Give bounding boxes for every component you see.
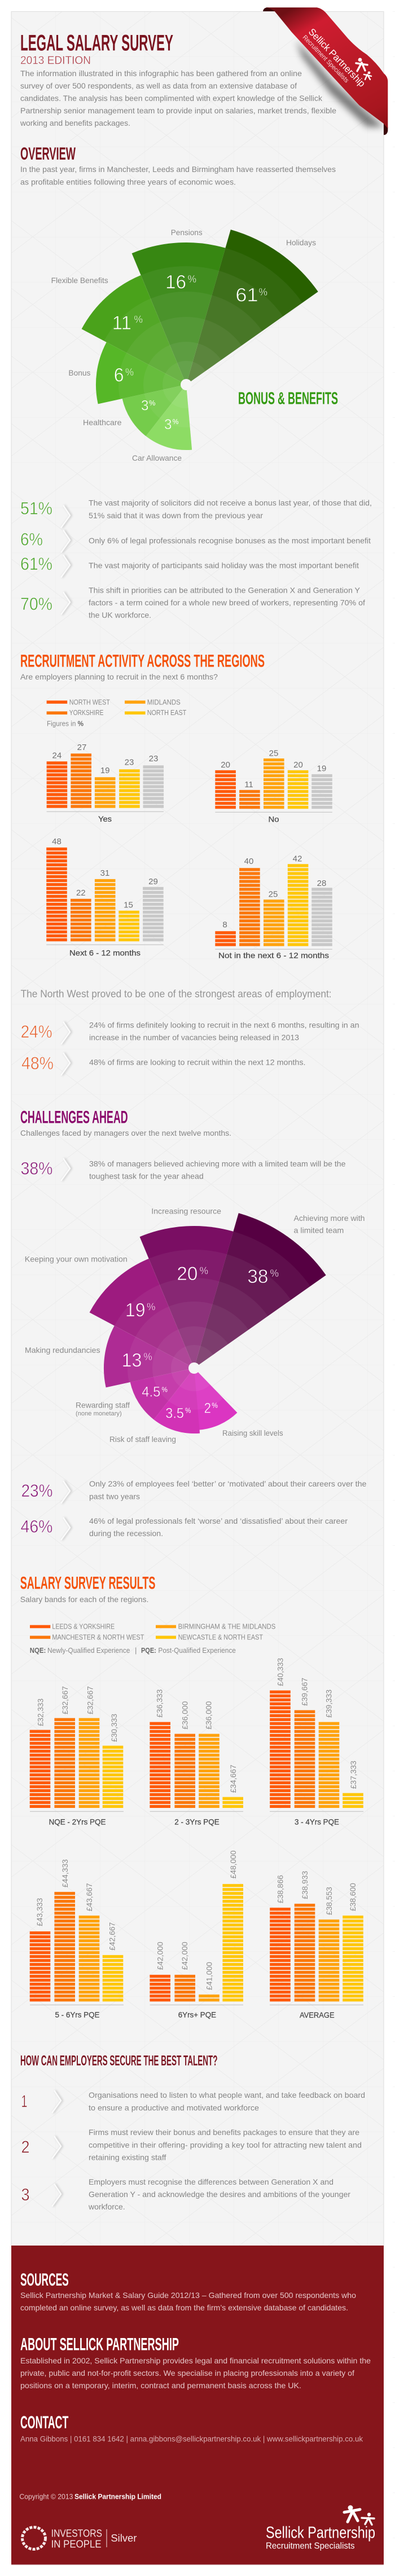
bar chart: NQE - 2Yrs PQE: NQE - 2Yrs PQE: [49, 1818, 106, 1827]
subheading: challenges: Challenges faced by managers over the next twelve months.: [20, 1128, 231, 1137]
step 3: Employers must recognise the differences between Generation X and: [89, 2177, 333, 2186]
step 1: Organisations need to listen to what people want, and take feedback on board: [89, 2090, 365, 2099]
chart: bonus and benefits fan: %: [188, 274, 196, 285]
chart: challenges fan: Rewarding staff: [76, 1401, 130, 1410]
chart: challenges fan: Making redundancies: [25, 1346, 100, 1355]
bar chart: average: £38,933: [300, 1871, 309, 1899]
ribbon: Sellick Partnership: [263, 7, 388, 135]
chart: bonus and benefits fan: 3: [141, 398, 148, 414]
stat: 46%: 46%: [20, 1516, 53, 1536]
chart: challenges fan: a limited team: [293, 1226, 344, 1235]
chart: challenges fan: (none monetary): [76, 1410, 122, 1417]
bar chart: average: [270, 1871, 363, 2019]
chart: challenges fan: %: [147, 1301, 155, 1312]
chart: bonus and benefits fan: Pensions: [171, 228, 203, 237]
bar chart: yes: 24: [52, 751, 62, 760]
bar chart: 5 - 6Yrs PQE: 5 - 6Yrs PQE: [55, 2010, 99, 2019]
bar chart: next 6-12 months: 48: [52, 837, 62, 846]
chart: bonus and benefits fan: Car Allowance: [132, 453, 182, 462]
subheading: salary: Salary bands for each of the regions.: [20, 1595, 148, 1604]
heading: overview: OVERVIEW: [20, 143, 76, 164]
chart: bonus and benefits fan: %: [173, 417, 179, 426]
overview text: [20, 165, 336, 187]
bar chart: 5 - 6Yrs PQE: £42,667: [108, 1922, 117, 1951]
bar chart: NQE - 2Yrs PQE: £32,333: [36, 1699, 45, 1726]
stat: 38%: 38%: [20, 1158, 53, 1179]
step 2: 2: [21, 2137, 29, 2156]
stat: 70%: [20, 585, 365, 619]
stat: 24%: 24%: [21, 1021, 52, 1042]
copyright: Copyright © 2013: [19, 2493, 73, 2501]
chart: bonus and benefits fan: Healthcare: [83, 418, 122, 427]
bar chart: 3 - 4Yrs PQE: £39,333: [324, 1690, 333, 1718]
stat: 70%: 70%: [20, 594, 52, 614]
bar chart: 3 - 4Yrs PQE: £37,333: [349, 1761, 358, 1789]
copyright: [19, 2493, 161, 2501]
contact details: Anna Gibbons | 0161 834 1642 | anna.gibbons@sellickpartnership.co.uk | www.sellickpartnership.co.uk: [20, 2434, 363, 2443]
chart: bonus and benefits fan: 11: [112, 312, 131, 334]
bar chart: average: £38,600: [348, 1883, 357, 1911]
bar chart: 5 - 6Yrs PQE: £43,667: [85, 1883, 94, 1911]
bar chart: not in the next 6-12 months: Not in the next 6 - 12 months: [218, 951, 329, 960]
bar chart: 3 - 4Yrs PQE: £39,667: [300, 1678, 309, 1706]
chart: challenges fan: Risk of staff leaving: [109, 1435, 176, 1444]
logo: investors in people: Silver: [111, 2533, 137, 2544]
stat: 61%: 61%: [20, 554, 52, 574]
bar chart: average: £38,553: [324, 1887, 333, 1915]
bar chart: not in the next 6-12 months: 28: [317, 879, 326, 888]
bar chart: yes: Yes: [98, 814, 112, 823]
chart: challenges fan: 38: [247, 1266, 268, 1287]
stat: 23%: [21, 1479, 367, 1503]
stat: 70%: the UK workforce.: [89, 610, 151, 619]
step 3: workforce.: [88, 2202, 125, 2211]
stat: 61%: The vast majority of participants said holiday was the most important benefit: [89, 561, 359, 570]
stat: 38%: toughest task for the year ahead: [89, 1172, 204, 1181]
about text: Established in 2002, Sellick Partnership provides legal and financial recruitment solutions within the: [20, 2356, 371, 2365]
step 1: to ensure a productive and motivated workforce: [89, 2103, 259, 2112]
overview text: as profitable entities following three years of economic woes.: [20, 178, 236, 187]
bar chart: 6Yrs+ PQE: £42,000: [156, 1942, 165, 1970]
stat: 48%: 48% of firms are looking to recruit within the next 12 months.: [89, 1057, 306, 1066]
step 3: [21, 2177, 350, 2211]
bar chart: not in the next 6-12 months: 42: [293, 854, 302, 863]
chart: challenges fan: 4.5: [142, 1384, 160, 1400]
bar chart: next 6-12 months: 31: [100, 868, 109, 878]
bar chart: 6Yrs+ PQE: [150, 1850, 243, 2019]
chart: challenges fan: Achieving more with: [293, 1214, 365, 1223]
bar chart: yes: 19: [100, 766, 110, 775]
sources text: [20, 2291, 356, 2312]
heading: how can employers secure the best talent: HOW CAN EMPLOYERS SECURE THE BEST TALENT?: [20, 2053, 217, 2069]
chart: challenges fan: 13: [122, 1349, 142, 1371]
chart: challenges fan: %: [143, 1351, 152, 1362]
stat: 6%: [20, 529, 371, 553]
chart: challenges fan: %: [185, 1406, 191, 1415]
stat: 51%: 51% said that it was down from the previous year: [89, 511, 263, 520]
sources text: completed an online survey, as well as data from the firm’s extensive database of candidates.: [20, 2303, 348, 2312]
intro text: working and benefits packages.: [20, 118, 130, 127]
heading: sources: SOURCES: [20, 2269, 69, 2290]
bar chart: next 6-12 months: 22: [76, 888, 86, 898]
copyright: Sellick Partnership Limited: [74, 2493, 161, 2501]
stat: 46%: 46% of legal professionals felt ‘worse’ and ‘dissatisfied’ about their career: [89, 1516, 348, 1525]
legend: salary regions: MANCHESTER & NORTH WEST: [52, 1633, 144, 1641]
intro text: The information illustrated in this infographic has been gathered from an online: [20, 69, 302, 78]
bar chart: 2 - 3Yrs PQE: £36,000: [204, 1701, 213, 1730]
bar chart: not in the next 6-12 months: 8: [222, 920, 227, 930]
step 2: retaining existing staff: [89, 2152, 166, 2162]
bar chart: 6Yrs+ PQE: £48,000: [229, 1850, 238, 1878]
chart: bonus and benefits fan: %: [258, 286, 267, 298]
chart: bonus and benefits fan: 61: [235, 284, 258, 306]
chart: bonus and benefits fan: [52, 230, 318, 461]
bar chart: next 6-12 months: 29: [148, 877, 158, 886]
intro text: survey of over 500 respondents, as well as data from an extensive database of: [20, 81, 297, 90]
about text: positions on a temporary, interim, contract and permanent basis across the UK.: [20, 2381, 301, 2390]
step 2: [21, 2128, 362, 2162]
stat: 70%: factors - a term coined for a whole new breed of workers, representing 70% of: [89, 598, 365, 607]
chart: challenges fan: 20: [177, 1263, 198, 1285]
chart: challenges fan: %: [162, 1385, 168, 1393]
bar chart: next 6-12 months: 15: [124, 900, 133, 910]
logo: investors in people: [23, 2528, 137, 2549]
heading: salary survey results: SALARY SURVEY RESULTS: [20, 1573, 155, 1593]
chart: bonus and benefits fan: %: [149, 399, 156, 407]
bar chart: 2 - 3Yrs PQE: £36,333: [155, 1689, 164, 1718]
chart: challenges fan: %: [200, 1265, 208, 1276]
stat: 24%: [21, 1020, 359, 1044]
stat: 51%: 51%: [20, 498, 52, 518]
logo: investors in people: IN PEOPLE: [51, 2538, 102, 2549]
stat: 38%: [20, 1158, 346, 1181]
chart: challenges fan: Increasing resource: [151, 1207, 221, 1216]
logo: sellick partnership: Recruitment Specialists: [266, 2541, 355, 2551]
chart: challenges fan: Raising skill levels: [222, 1428, 283, 1437]
overview text: In the past year, firms in Manchester, Leeds and Birmingham have reasserted themselves: [20, 165, 336, 174]
bar chart: no: 20: [221, 760, 230, 770]
stat: 70%: This shift in priorities can be attributed to the Generation X and Generation Y: [89, 585, 361, 594]
legend: salary regions: NQE:: [30, 1646, 46, 1655]
chart: challenges fan: Keeping your own motivation: [25, 1254, 128, 1263]
chart: challenges fan: %: [212, 1401, 218, 1410]
panel: footer: [11, 2246, 384, 2565]
stat: 51%: The vast majority of solicitors did not receive a bonus last year, of those that did,: [89, 499, 372, 508]
bar chart: 5 - 6Yrs PQE: [30, 1859, 124, 2019]
step 1: 1: [21, 2092, 27, 2111]
bar chart: 5 - 6Yrs PQE: £43,333: [35, 1898, 44, 1926]
stat: 24%: 24% of firms definitely looking to recruit in the next 6 months, resulting in an: [89, 1020, 359, 1029]
intro text: Partnership senior management team to provide input on salaries, market trends, flexible: [20, 106, 336, 115]
bar chart: 3 - 4Yrs PQE: £40,333: [275, 1658, 284, 1686]
bar chart: next 6-12 months: [46, 837, 164, 957]
legend: regions: Figures in %: [47, 720, 84, 728]
bar chart: 3 - 4Yrs PQE: 3 - 4Yrs PQE: [295, 1818, 339, 1827]
legend: regions: MIDLANDS: [147, 698, 181, 706]
heading: about: ABOUT SELLICK PARTNERSHIP: [20, 2334, 179, 2354]
chart: bonus and benefits fan: Bonus: [68, 368, 90, 377]
bar chart: 2 - 3Yrs PQE: £36,000: [181, 1701, 190, 1730]
step 3: 3: [21, 2185, 29, 2204]
legend: salary regions: PQE:: [141, 1646, 156, 1655]
stat: 6%: Only 6% of legal professionals recognise bonuses as the most important benefit: [89, 536, 371, 545]
bar chart: no: 20: [293, 760, 303, 770]
step 2: competitive in their offering- providing a key tool for attracting new talent and: [89, 2140, 362, 2149]
bar chart: yes: 23: [149, 754, 158, 764]
chart: bonus and benefits fan: 6: [114, 365, 124, 386]
logo: investors in people: INVESTORS: [51, 2528, 102, 2539]
stat: 6%: 6%: [20, 529, 43, 549]
about text: [20, 2356, 371, 2390]
chart: bonus and benefits fan: Holidays: [286, 238, 316, 247]
chart: challenges fan: 2: [204, 1401, 211, 1417]
subtitle: 2013 EDITION: [20, 54, 91, 67]
stat: 46%: [20, 1516, 348, 1540]
chart: bonus and benefits fan: Flexible Benefits: [51, 276, 108, 285]
step 2: Firms must review their bonus and benefits packages to ensure that they are: [89, 2128, 359, 2137]
about text: private, public and not-for-profit sectors. We specialise in placing professionals into a variety of: [20, 2368, 354, 2377]
stat: 38%: 38% of managers believed achieving more with a limited team will be the: [89, 1159, 346, 1168]
intro text: [20, 69, 336, 127]
heading: contact: CONTACT: [20, 2412, 68, 2432]
bar chart: average: AVERAGE: [300, 2010, 335, 2019]
bar chart: NQE - 2Yrs PQE: £30,333: [109, 1714, 118, 1742]
bar chart: NQE - 2Yrs PQE: £32,667: [60, 1686, 69, 1714]
bar chart: NQE - 2Yrs PQE: £32,667: [86, 1686, 95, 1714]
bar chart: NQE - 2Yrs PQE: [30, 1686, 124, 1827]
bar chart: yes: 23: [125, 758, 134, 767]
bar chart: 2 - 3Yrs PQE: [150, 1689, 243, 1827]
step 3: Generation Y - and acknowledge the desires and ambitions of the younger: [89, 2190, 350, 2199]
chart: challenges fan: 3.5: [165, 1405, 184, 1421]
bar chart: no: No: [269, 815, 279, 824]
bar chart: average: £38,866: [275, 1875, 284, 1903]
ribbon: Sellick Partnership: Sellick Partnership: [306, 27, 367, 89]
title: LEGAL SALARY SURVEY: [20, 30, 173, 55]
legend: regions: YORKSHIRE: [69, 709, 104, 717]
ribbon: Sellick Partnership: Recruitment Specialists: [301, 34, 350, 85]
chart: challenges fan: %: [270, 1268, 279, 1279]
stat: 48%: [21, 1053, 306, 1075]
legend: salary regions: [30, 1623, 275, 1655]
legend: salary regions: LEEDS & YORKSHIRE: [52, 1623, 115, 1631]
chart: challenges fan: 19: [125, 1299, 146, 1321]
legend: salary regions: BIRMINGHAM & THE MIDLANDS: [178, 1623, 275, 1631]
chart: challenges fan: [25, 1208, 365, 1444]
bar chart: not in the next 6-12 months: [215, 854, 332, 960]
legend: salary regions: Newly-Qualified Experience: [47, 1646, 130, 1655]
sources text: Sellick Partnership Market & Salary Guide 2012/13 – Gathered from over 500 respondents who: [20, 2291, 356, 2300]
stat: 46%: during the recession.: [89, 1529, 163, 1538]
stat: 48%: 48%: [21, 1053, 54, 1073]
subheading: recruitment: Are employers planning to recruit in the next 6 months?: [20, 672, 218, 681]
bar chart: no: 19: [317, 764, 326, 773]
bar chart: 3 - 4Yrs PQE: [270, 1658, 363, 1827]
stat: 51%: [20, 498, 372, 528]
heading: challenges ahead: CHALLENGES AHEAD: [20, 1106, 128, 1127]
bar chart: 2 - 3Yrs PQE: 2 - 3Yrs PQE: [174, 1818, 220, 1827]
bar chart: no: 11: [244, 780, 253, 789]
legend: regions: NORTH EAST: [147, 709, 187, 717]
logo: sellick partnership: [266, 2505, 375, 2551]
legend: regions: [47, 698, 187, 728]
bar chart: not in the next 6-12 months: 25: [269, 890, 278, 899]
bar chart: no: 25: [269, 749, 278, 758]
chart: bonus and benefits fan: 16: [165, 272, 186, 293]
legend: regions: NORTH WEST: [69, 698, 110, 706]
legend: salary regions: |: [135, 1646, 137, 1655]
step 1: [21, 2090, 365, 2113]
chart: bonus and benefits fan: %: [134, 314, 143, 325]
intro text: candidates. The analysis has been complimented with expert knowledge of the Sellick: [20, 94, 323, 103]
stat: 24%: increase in the number of vacancies being released in 2013: [89, 1033, 299, 1042]
bar chart: 6Yrs+ PQE: 6Yrs+ PQE: [178, 2010, 216, 2019]
bar chart: not in the next 6-12 months: 40: [244, 857, 253, 866]
text: north west summary: The North West proved to be one of the strongest areas of employment:: [21, 988, 332, 999]
bar chart: next 6-12 months: Next 6 - 12 months: [69, 948, 141, 957]
stat: 23%: 23%: [21, 1480, 53, 1501]
chart: bonus and benefits fan: %: [125, 367, 134, 378]
legend: salary regions: NEWCASTLE & NORTH EAST: [178, 1633, 263, 1641]
bar chart: 2 - 3Yrs PQE: £34,667: [229, 1765, 238, 1793]
bar chart: 5 - 6Yrs PQE: £44,333: [60, 1859, 69, 1887]
stat: 61%: [20, 554, 359, 577]
stat: 23%: past two years: [89, 1492, 140, 1501]
bar chart: no: [215, 749, 332, 824]
bar chart: 6Yrs+ PQE: £41,000: [204, 1962, 213, 1990]
chart: bonus and benefits fan: 3: [164, 417, 172, 433]
legend: salary regions: Post-Qualified Experience: [158, 1646, 236, 1655]
bar chart: 6Yrs+ PQE: £42,000: [180, 1942, 189, 1970]
bar chart: yes: 27: [77, 743, 86, 752]
bar chart: yes: [47, 743, 164, 823]
stat: 23%: Only 23% of employees feel ‘better’ or ‘motivated’ about their careers over the: [89, 1479, 367, 1488]
